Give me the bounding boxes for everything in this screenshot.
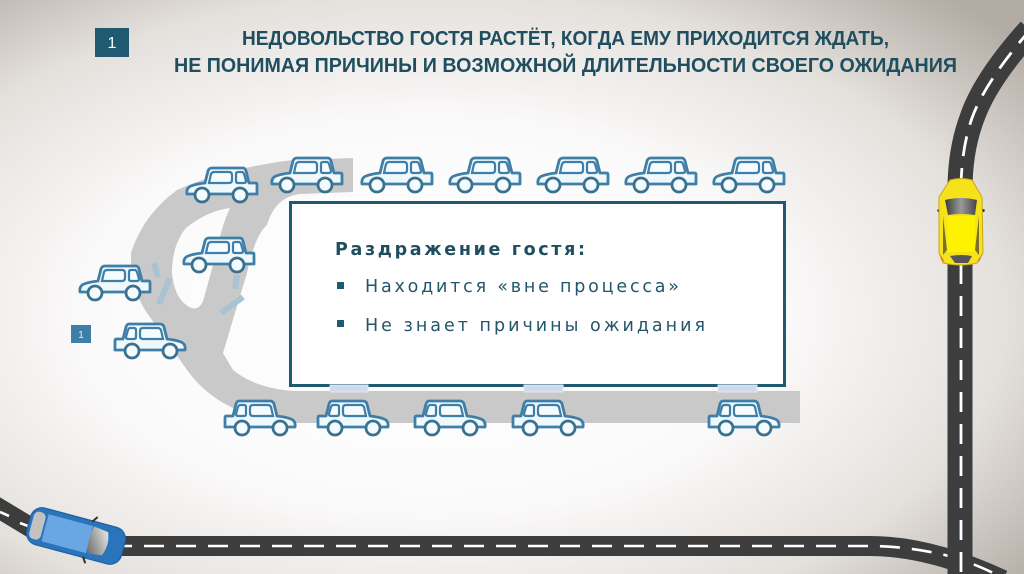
title: [174, 27, 957, 77]
icon: yellow car: [937, 178, 985, 265]
panel heading: Раздражение гостя:: [335, 240, 585, 260]
queue cars: top row: [272, 158, 784, 192]
queue cars: bottom row: [225, 401, 779, 435]
grey parking road: [131, 158, 800, 423]
bullet 1: Находится «вне процесса»: [365, 277, 679, 297]
main text panel: [290, 202, 784, 386]
queue cars: left curve: [80, 168, 257, 358]
blue direction marks: [154, 263, 243, 313]
title: НЕДОВОЛЬСТВО ГОСТЯ РАСТЁТ, КОГДА ЕМУ ПРИХОДИТСЯ ЖДАТЬ,: [242, 27, 889, 50]
road: right vertical: [960, 30, 1024, 574]
title: НЕ ПОНИМАЯ ПРИЧИНЫ И ВОЗМОЖНОЙ ДЛИТЕЛЬНОСТИ СВОЕГО ОЖИДАНИЯ: [174, 53, 957, 77]
small number badge: 1: [78, 330, 84, 341]
service windows: [330, 385, 757, 392]
slide number badge: [95, 28, 129, 57]
small number badge: [71, 325, 91, 343]
bullet 2: Не знает причины ожидания: [365, 316, 705, 336]
slide number badge: 1: [108, 35, 117, 52]
road: bottom horizontal: [0, 506, 1003, 574]
icon: blue car: [22, 500, 130, 572]
